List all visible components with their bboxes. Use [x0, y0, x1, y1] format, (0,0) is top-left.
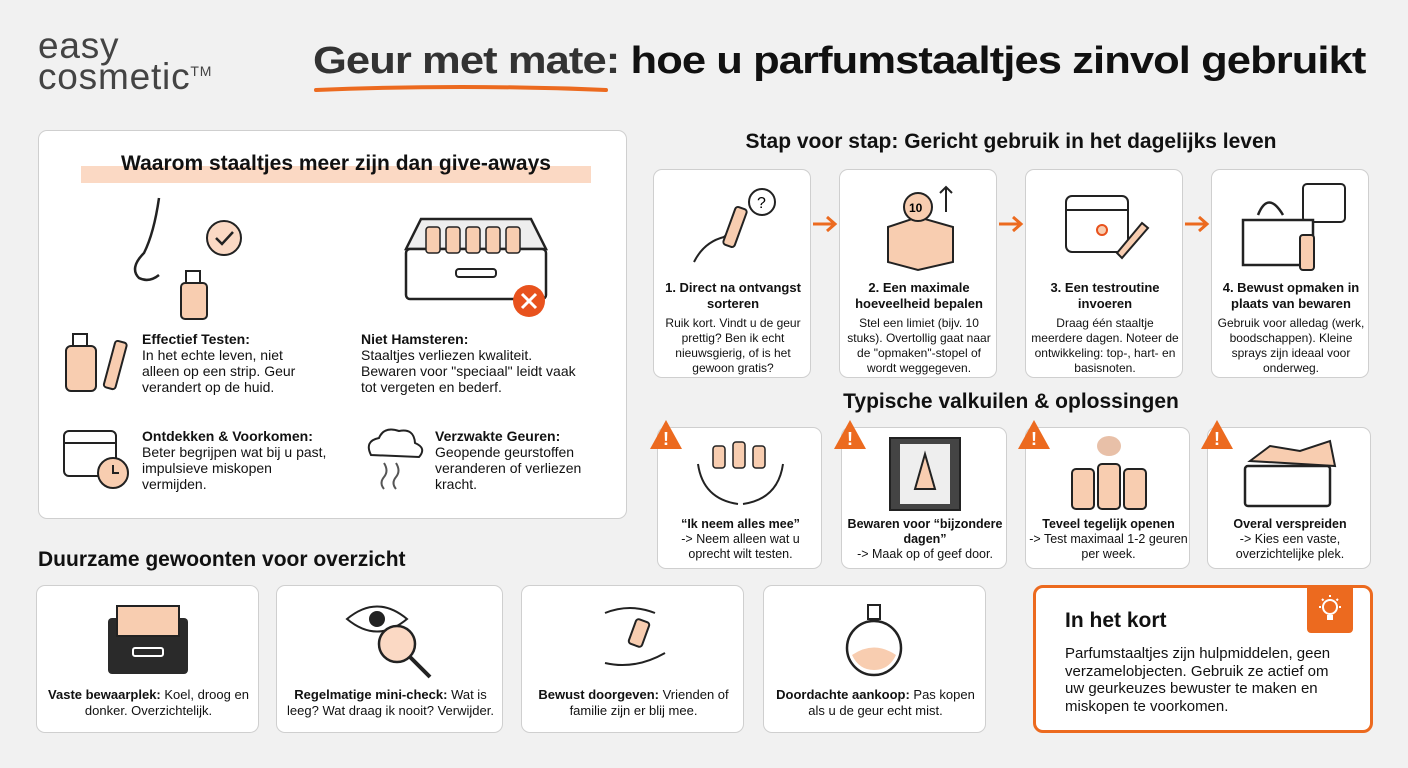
card: aankoop — [763, 585, 986, 733]
arrow — [813, 216, 838, 232]
text: effectief testen: Effectief Testen: — [142, 331, 250, 347]
card: mini-check — [276, 585, 503, 733]
card: vaste bewaarplek — [36, 585, 259, 733]
pitfall 3: -> Test maximaal 1-2 geuren per week. — [1029, 532, 1188, 561]
step 3 — [1025, 169, 1183, 378]
step 4: 4. Bewust opmaken in plaats van bewaren — [1223, 280, 1359, 311]
panel: why samples — [38, 130, 627, 519]
icon: calendar clock — [63, 430, 129, 489]
icon: spray bottles — [65, 333, 128, 392]
pitfall 2: -> Maak op of geef door. — [857, 547, 993, 561]
callout: in het kort: In het kort — [1065, 609, 1167, 632]
icon: perfume bottle — [846, 604, 902, 676]
card: vaste bewaarplek: Vaste bewaarplek: Koel, droog en donker. Overzichtelijk. — [48, 687, 249, 718]
icon: warning triangles: ! — [1031, 429, 1037, 449]
icon: hands passing — [604, 607, 666, 666]
arrow — [999, 216, 1024, 232]
title underline — [314, 85, 608, 92]
callout: in het kort — [1033, 585, 1373, 733]
text: effectief testen: In het echte leven, niet alleen op een strip. Geur verandert op de huid. — [142, 347, 295, 395]
heading: pitfalls: Typische valkuilen & oplossingen — [843, 390, 1179, 413]
heading: steps: Stap voor stap: Gericht gebruik in het dagelijks leven — [746, 130, 1276, 153]
card: doorgeven: Bewust doorgeven: Vrienden of familie zijn er blij mee. — [538, 687, 729, 718]
step 3: Draag één staaltje meerdere dagen. Noteer de ontwikkeling: top-, hart- en basisnoten. — [1031, 316, 1179, 375]
pitfall 4: -> Kies een vaste, overzichtelijke plek. — [1236, 532, 1344, 561]
icon: messy box — [1244, 440, 1336, 508]
step 2 — [839, 169, 997, 378]
icon: open bottles — [1071, 436, 1147, 510]
logo: cosmeticTM — [38, 56, 212, 97]
icon: box with 10: 10 — [909, 201, 923, 215]
pitfall 3 — [1025, 427, 1190, 569]
icon: eye magnifier — [346, 606, 432, 678]
icon: hand with sample: ? — [757, 195, 766, 212]
pitfall 4: Overal verspreiden — [1233, 517, 1347, 531]
step 1 — [653, 169, 811, 378]
card: doorgeven — [521, 585, 744, 733]
text: ontdekken: Ontdekken & Voorkomen: — [142, 428, 313, 444]
text: ontdekken: Beter begrijpen wat bij u past, impulsieve miskopen vermijden. — [142, 444, 326, 492]
icon: hand with sample — [693, 188, 776, 262]
text: niet hamsteren: Staaltjes verliezen kwaliteit. Bewaren voor "speciaal" leidt vaak tot vergeten en bederf. — [361, 347, 576, 395]
step 2: Stel een limiet (bijv. 10 stuks). Overtollig gaat naar de "opmaken"-stopel of wordt weggegeven. — [847, 316, 991, 375]
icon: calendar — [1065, 195, 1150, 260]
logo: easy — [38, 25, 119, 66]
icon: warning triangles — [650, 420, 1233, 449]
pitfall 1: -> Neem alleen wat u oprecht wilt testen. — [681, 532, 800, 561]
step 2: 2. Een maximale hoeveelheid bepalen — [855, 280, 983, 311]
title: Geur met mate: hoe u parfumstaaltjes zinvol gebruikt — [313, 40, 1365, 82]
icon: handbag — [1242, 183, 1346, 271]
step 1: Ruik kort. Vindt u de geur prettig? Ben ik echt nieuwsgierig, of is het gewoon gratis? — [665, 316, 801, 375]
text: verzwakte geuren: Geopende geurstoffen veranderen of verliezen kracht. — [435, 444, 581, 492]
card: mini-check: Regelmatige mini-check: Wat is leeg? Wat draag ik nooit? Verwijder. — [287, 687, 494, 718]
icon: lightbulb — [1307, 588, 1353, 633]
pitfall 1 — [657, 427, 822, 569]
logo — [38, 25, 212, 97]
icon: cabinet with party hat — [889, 437, 961, 511]
icon: warning triangles: ! — [1214, 429, 1220, 449]
icon: drawer with bottles — [404, 218, 548, 317]
icon: box with 10 — [887, 186, 954, 271]
icon: cloud — [368, 428, 424, 490]
card: aankoop: Doordachte aankoop: Pas kopen als u de geur echt mist. — [776, 687, 975, 718]
icon: warning triangles: ! — [847, 429, 853, 449]
pitfall 4 — [1207, 427, 1371, 569]
text: niet hamsteren: Niet Hamsteren: — [361, 331, 468, 347]
step 4 — [1211, 169, 1369, 378]
text: verzwakte geuren: Verzwakte Geuren: — [435, 428, 560, 444]
pitfall 3: Teveel tegelijk openen — [1042, 517, 1175, 531]
callout: in het kort: Parfumstaaltjes zijn hulpmiddelen, geen verzamelobjecten. Gebruik ze actief om uw geurkeuzes bewuster te maken en miskopen te voorkomen. — [1065, 645, 1330, 714]
pitfall 1: “Ik neem alles mee” — [681, 517, 800, 531]
pitfall 2 — [841, 427, 1007, 569]
panel heading — [81, 152, 591, 183]
heading: habits: Duurzame gewoonten voor overzicht — [38, 548, 406, 571]
step 4: Gebruik voor alledag (werk, boodschappen). Kleine sprays zijn ideaal voor onderweg. — [1218, 316, 1364, 375]
panel heading: Waarom staaltjes meer zijn dan give-aways — [121, 152, 551, 175]
icon: warning triangles: ! — [663, 429, 669, 449]
step 3: 3. Een testroutine invoeren — [1050, 280, 1160, 311]
step 1: 1. Direct na ontvangst sorteren — [665, 280, 801, 311]
icon: nose and spray — [134, 198, 242, 320]
pitfall 2: Bewaren voor “bijzondere dagen” — [848, 517, 1002, 546]
icon: hands with bottles — [697, 441, 784, 505]
icon: drawer — [108, 605, 188, 674]
arrow — [1185, 216, 1210, 232]
